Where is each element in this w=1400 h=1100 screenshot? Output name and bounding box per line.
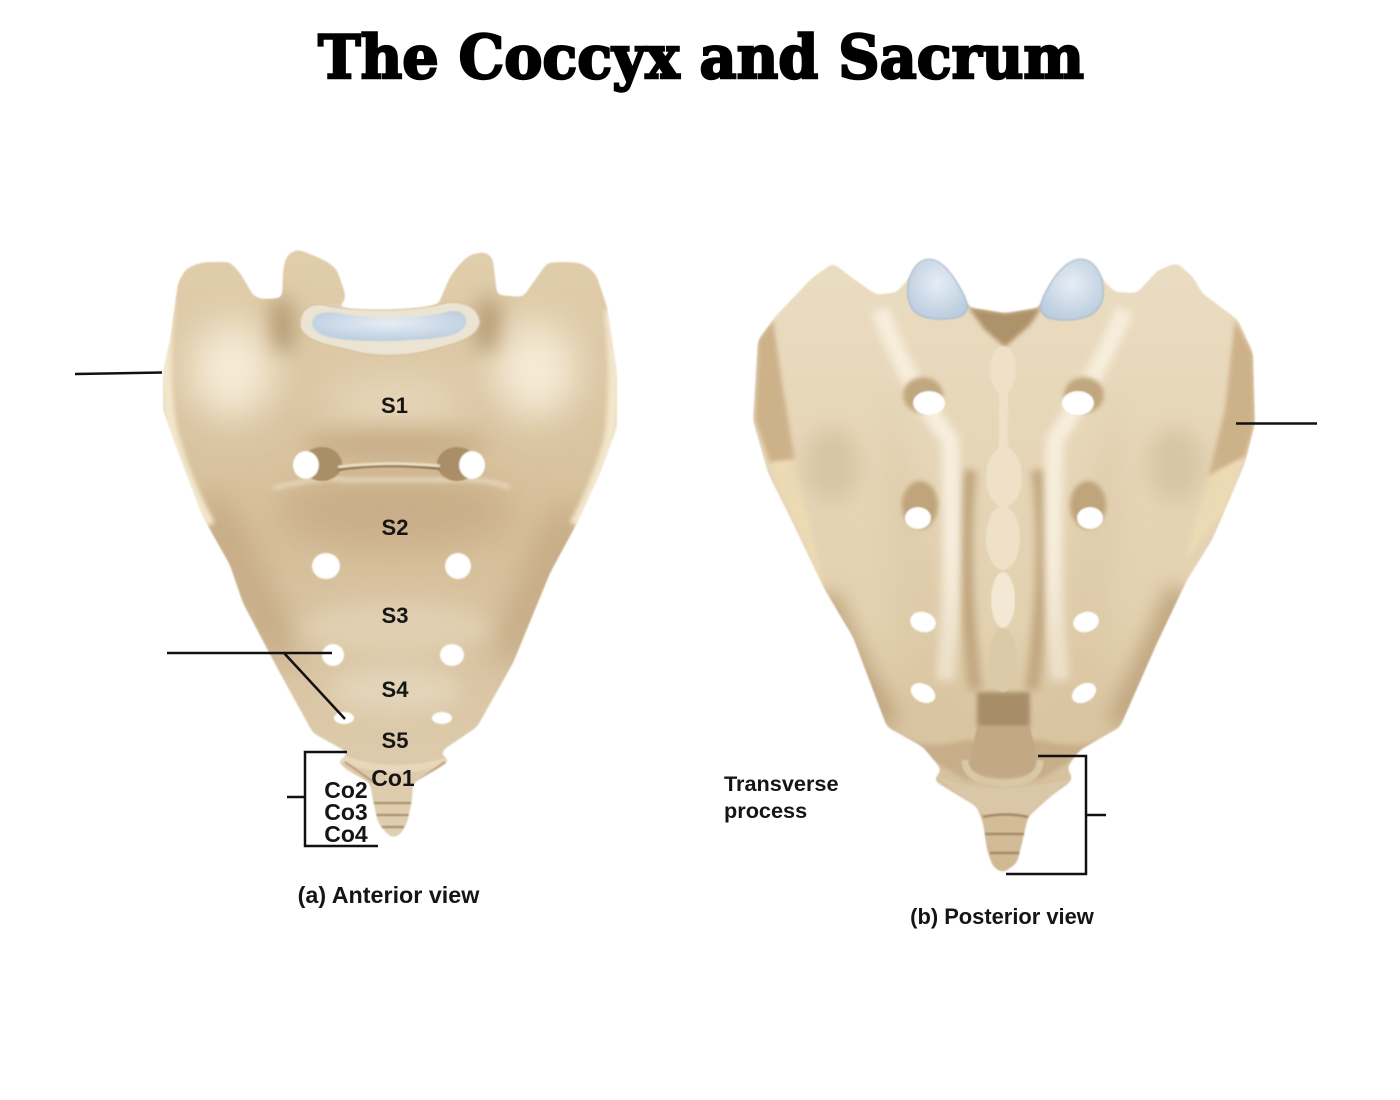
label: S4: S4 <box>382 677 409 702</box>
label: S5: S5 <box>382 728 408 753</box>
illustration: posterior sacrum and coccyx <box>753 259 1255 873</box>
label: transverse process: Transverse <box>724 771 839 796</box>
panel: posterior view <box>724 259 1317 929</box>
label: S3: S3 <box>382 603 408 628</box>
sacral promontory disc <box>300 302 480 355</box>
illustration: anterior sacrum and coccyx <box>163 250 617 837</box>
label: Co3: Co3 <box>324 799 368 825</box>
title: The Coccyx and Sacrum <box>318 23 1084 93</box>
label: S1: S1 <box>381 393 408 418</box>
label: Co1: Co1 <box>371 765 415 791</box>
label: S2: S2 <box>382 515 408 540</box>
caption: anterior view: (a) Anterior view <box>298 882 480 908</box>
label: Co2: Co2 <box>324 777 368 803</box>
panel: anterior view <box>75 250 617 908</box>
articular facets <box>908 259 1103 320</box>
leader lines: foramina <box>167 653 345 719</box>
sacral foramina, anterior <box>293 447 485 724</box>
leader line: upper right <box>1236 422 1317 425</box>
sacral foramina, posterior <box>902 377 1106 707</box>
bracket: coccyx <box>287 752 378 846</box>
leader line: upper left <box>75 372 162 374</box>
label: transverse process: process <box>724 798 807 823</box>
median sacral crest <box>986 346 1022 692</box>
caption: posterior view: (b) Posterior view <box>910 904 1095 929</box>
bracket: coccyx <box>1006 756 1106 874</box>
label: Co4: Co4 <box>324 821 368 847</box>
